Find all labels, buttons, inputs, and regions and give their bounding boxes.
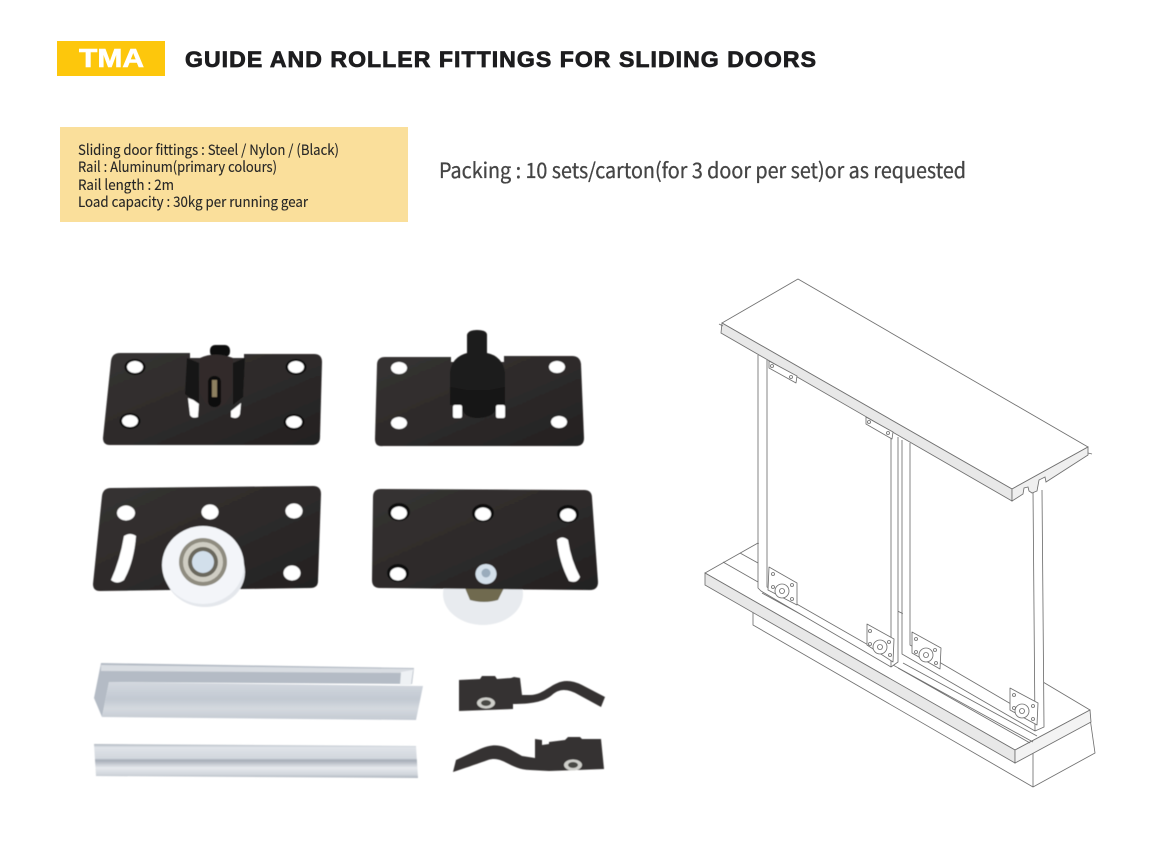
right door [902,440,1044,731]
photo: U-channel aluminium rail [94,663,423,720]
left door [758,355,898,667]
panel: specifications: Load capacity : 30kg per running gear [78,191,308,212]
brand badge: TMA: TMA [79,43,144,73]
title: GUIDE AND ROLLER FITTINGS FOR SLIDING DOORS [185,47,817,72]
roller plate b [867,624,894,662]
packing note: Packing : 10 sets/carton(for 3 door per set)or as requested [439,155,966,185]
photo: roller plate, front [93,486,321,607]
top panel [719,279,1092,501]
brand badge: TMA [57,41,165,76]
photo: upper guide clip [459,676,605,711]
panel: specifications: Rail : Aluminum(primary colours) [78,156,277,177]
photo: guide plate with slotted guide [103,345,322,445]
photo: flat aluminium rail [94,744,418,778]
roller plate a [768,567,797,605]
roller plate c [912,632,941,669]
roller plate d [1010,688,1038,725]
floor slab [705,543,1091,763]
photo: lower guide clip [453,737,604,772]
panel: specifications: Sliding door fittings : Steel / Nylon / (Black) [78,139,339,160]
top bracket left [769,361,797,383]
floor base block [753,612,1095,787]
photo: roller plate, back [372,489,598,625]
photo: guide plate with pin [375,330,584,446]
panel: specifications: Rail length : 2m [78,174,174,195]
panel: specifications [60,127,408,222]
technical drawing: sliding door assembly [705,279,1095,787]
top bracket centre [866,417,893,439]
